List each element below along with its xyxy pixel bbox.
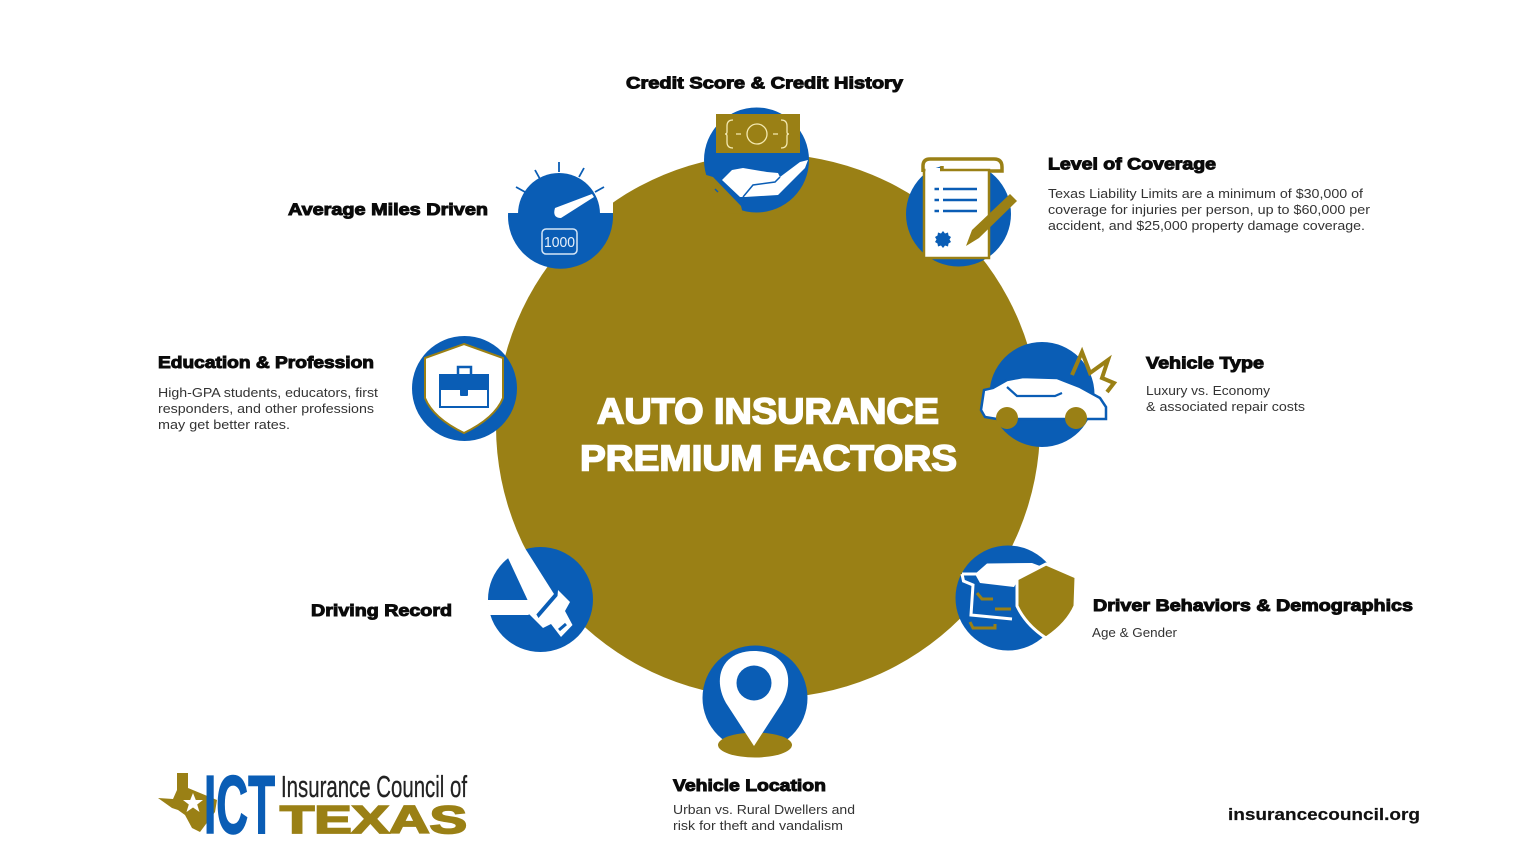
heading: driving record: Driving Record	[311, 601, 452, 620]
text: high-gpa students	[158, 386, 379, 432]
heading: level of coverage: Level of Coverage	[1048, 154, 1216, 174]
logo mark: texas shape and star	[158, 773, 217, 832]
heading: credit score: Credit Score & Credit History	[626, 74, 904, 92]
title	[580, 390, 957, 478]
icon: cash in hand	[703, 108, 809, 214]
text: luxury vs economy	[1146, 384, 1305, 414]
heading: driver behaviors: Driver Behaviors & Demographics	[1093, 596, 1413, 615]
icon: shield with briefcase	[412, 336, 517, 441]
text: urban vs rural: risk for theft and vandalism	[673, 819, 843, 833]
factor: driver behaviors and demographics	[956, 546, 1413, 650]
icon: map pin	[702, 646, 808, 758]
heading: vehicle type: Vehicle Type	[1146, 354, 1264, 372]
text: texas liability limits: coverage for injuries per person, up to $60,000 per	[1048, 203, 1370, 217]
website url: insurancecouncil.org	[1228, 805, 1420, 824]
central gold circle	[496, 154, 1040, 698]
text: luxury vs economy: & associated repair costs	[1146, 400, 1305, 414]
text: age and gender: Age & Gender	[1092, 626, 1177, 640]
text: texas liability limits: accident, and $25,000 property damage coverage.	[1048, 219, 1365, 233]
icon: seat belt	[488, 545, 593, 652]
text: texas liability limits	[1048, 187, 1370, 233]
heading: education: Education & Profession	[158, 353, 374, 372]
title: AUTO INSURANCE	[597, 390, 939, 432]
text: high-gpa students: High-GPA students, educators, first	[158, 386, 379, 400]
text: urban vs rural	[673, 803, 855, 833]
text: texas liability limits: Texas Liability Limits are a minimum of $30,000 of	[1048, 187, 1364, 201]
icon: speedometer	[508, 162, 613, 269]
text: luxury vs economy: Luxury vs. Economy	[1146, 384, 1271, 398]
icon: damaged car	[981, 342, 1114, 447]
heading: average miles driven: Average Miles Driven	[288, 200, 488, 219]
icon: car and shield	[956, 546, 1076, 650]
text: high-gpa students: responders, and other professions	[158, 402, 374, 416]
factor: average miles driven	[288, 162, 613, 269]
icon: policy document and pen	[906, 159, 1017, 266]
logo: insurance council of texas	[158, 758, 467, 851]
logo: ICT letters: ICT	[204, 758, 275, 851]
logo: insurance council of: Insurance Council of	[281, 769, 467, 804]
factor: credit score and credit history	[626, 74, 904, 214]
factor: education and profession	[158, 336, 517, 441]
text: urban vs rural: Urban vs. Rural Dwellers and	[673, 803, 855, 817]
factor: level of coverage	[906, 154, 1370, 266]
text: high-gpa students: may get better rates.	[158, 418, 290, 432]
title: PREMIUM FACTORS	[580, 438, 957, 478]
factor: driving record	[311, 545, 593, 652]
icon: speedometer: 1000	[544, 234, 575, 251]
factor: vehicle type	[981, 342, 1305, 447]
factor: vehicle location	[673, 646, 855, 833]
logo: texas wordmark: TEXAS	[280, 799, 467, 842]
heading: vehicle location: Vehicle Location	[673, 776, 826, 795]
